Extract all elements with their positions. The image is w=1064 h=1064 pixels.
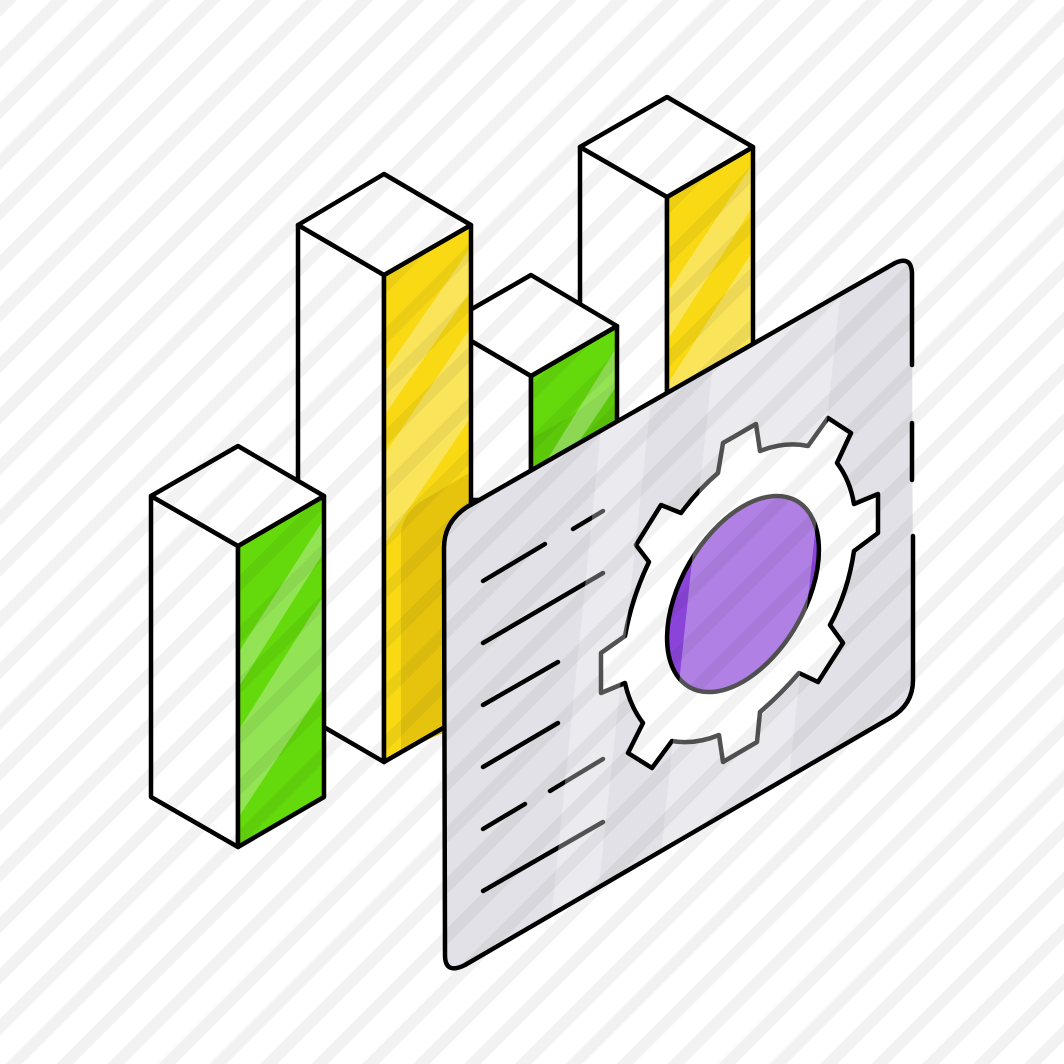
bar: back yellow xyxy=(580,97,753,420)
panel: settings screen xyxy=(444,250,913,968)
bar: front green xyxy=(151,446,324,847)
text lines xyxy=(483,511,603,891)
icon: gear xyxy=(601,418,878,768)
bar: middle green xyxy=(444,275,617,500)
bar: tall yellow xyxy=(298,174,471,762)
panel outline xyxy=(444,261,913,968)
glass reflection bands xyxy=(552,298,840,912)
panel background xyxy=(444,261,913,968)
gear centre: purple ellipse xyxy=(636,470,850,718)
